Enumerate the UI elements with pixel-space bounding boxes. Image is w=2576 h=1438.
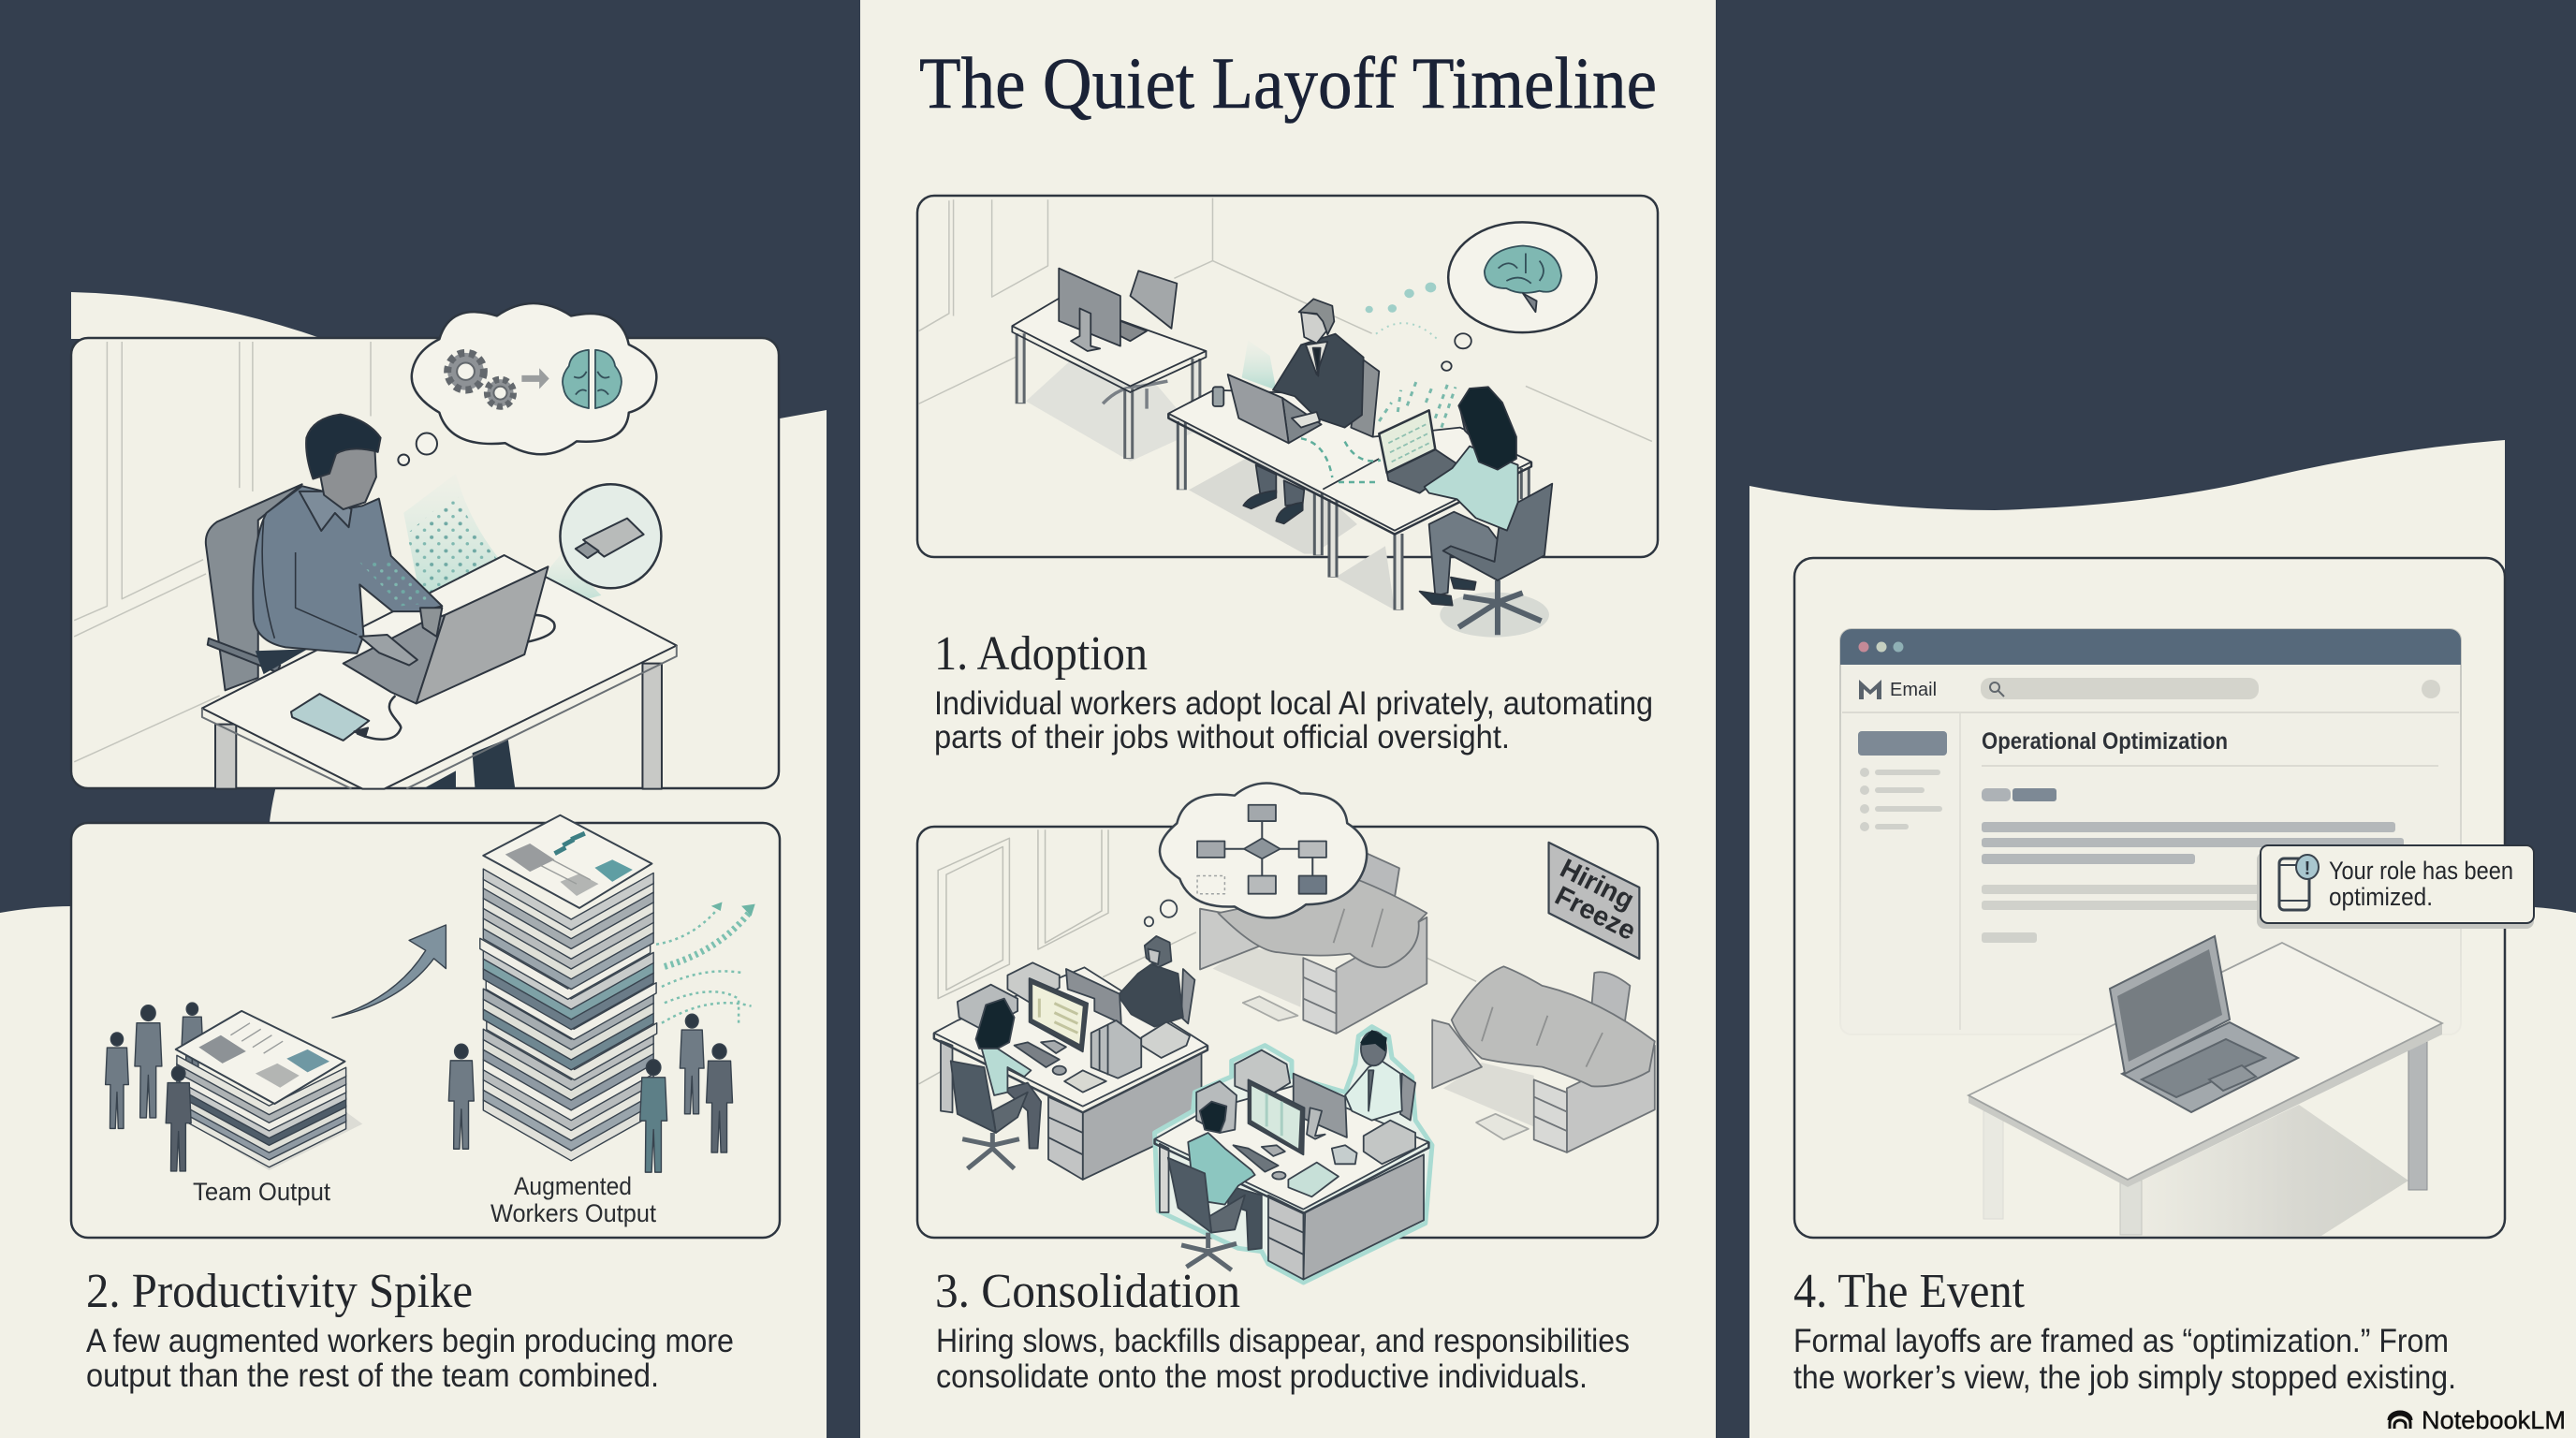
legs under desk xyxy=(423,739,515,789)
man's chair xyxy=(1351,359,1379,437)
text: event description: the worker’s view, the job simply stopped existing. xyxy=(1793,1359,2456,1396)
panel: worker with local AI xyxy=(71,303,779,789)
left column paper top scrap xyxy=(71,292,323,339)
thought cloud with flowchart xyxy=(1145,784,1367,926)
growth arrow xyxy=(332,925,446,1018)
scattered papers xyxy=(1243,996,1529,1139)
man in teal and chair xyxy=(1168,1102,1262,1270)
teal data glow xyxy=(1242,340,1276,390)
text: consolidation description xyxy=(936,1323,1630,1395)
empty desk xyxy=(1969,943,2442,1235)
NotebookLM logo: NotebookLM xyxy=(2422,1406,2566,1434)
thought cloud xyxy=(398,303,656,465)
augmented figures xyxy=(448,1014,733,1172)
floating data over desk xyxy=(1379,381,1456,428)
woman's chair base xyxy=(1440,580,1549,638)
woman's laptop xyxy=(1379,410,1458,493)
text: event description xyxy=(1793,1323,2456,1396)
heading: 4. The Event: 4. The Event xyxy=(1793,1265,2026,1318)
woman's legs and shoes xyxy=(1420,512,1498,606)
text: adoption description xyxy=(934,685,1653,756)
glow outline xyxy=(1155,1027,1432,1283)
arrow heads xyxy=(711,902,755,917)
office chair xyxy=(206,484,302,690)
sign text: Hiring Freeze: Freeze xyxy=(1550,881,1640,946)
woman's hair xyxy=(1458,387,1516,470)
window controls xyxy=(1859,642,1904,652)
icon: mail logo xyxy=(1859,680,1881,699)
icon: gears xyxy=(447,353,514,406)
external drive xyxy=(291,694,369,741)
text: adoption description: parts of their jobs without official oversight. xyxy=(934,719,1510,756)
laptop on desk xyxy=(2110,936,2298,1112)
sign text: Hiring Freeze: Hiring xyxy=(1555,854,1639,916)
email label: Email xyxy=(1890,680,1937,700)
woman's torso xyxy=(1425,447,1518,531)
panel: the event scene xyxy=(1794,558,2534,1238)
left desk monitors xyxy=(1030,969,1121,1053)
desktop monitor xyxy=(1059,269,1147,351)
woman at left desk xyxy=(975,999,1041,1149)
email subject: Operational Optimization xyxy=(1982,728,2228,755)
title: The Quiet Layoff Timeline xyxy=(919,42,1657,124)
empty desk shadow xyxy=(1026,361,1196,462)
left column paper xyxy=(0,410,827,1438)
long desk xyxy=(1168,390,1531,610)
augmented desk stacks and book xyxy=(1196,1050,1415,1196)
text: adoption description: Individual workers adopt local AI privately, automating xyxy=(934,685,1653,722)
label: augmented workers output: Augmented xyxy=(514,1172,632,1200)
window title bar xyxy=(1840,629,2461,665)
icon: usb stick bubble xyxy=(560,484,661,588)
icon: brain xyxy=(563,350,622,408)
team figures behind pile xyxy=(106,1003,203,1128)
room lines xyxy=(919,198,1652,441)
right column paper xyxy=(1749,440,2576,1438)
text: consolidation description: Hiring slows, backfills disappear, and responsibilities xyxy=(936,1323,1630,1359)
long desk floor shadows xyxy=(1189,456,1395,610)
jar xyxy=(1213,387,1223,406)
cables xyxy=(357,615,555,740)
glowing data beam xyxy=(403,474,601,611)
desk legs xyxy=(215,664,662,789)
notification callout xyxy=(2257,845,2534,929)
email window xyxy=(1840,629,2461,1034)
hiring freeze sign xyxy=(1549,843,1639,959)
icon: phone alert: ! xyxy=(2305,858,2310,879)
team figure in front of pile xyxy=(166,1066,191,1171)
covered desk back xyxy=(1200,853,1427,1034)
man in sweater xyxy=(253,415,442,666)
small output pile xyxy=(176,1011,362,1170)
heading: 1. Adoption: 1. Adoption xyxy=(934,627,1148,681)
email body lines xyxy=(1982,822,2404,943)
augmented desk xyxy=(1155,1086,1428,1280)
augmented desk monitors xyxy=(1249,1074,1347,1156)
man's laptop xyxy=(1228,374,1322,443)
notification text: optimized. xyxy=(2329,883,2433,911)
room lines xyxy=(919,829,1476,1084)
empty desk xyxy=(1012,299,1206,459)
sidebar xyxy=(1858,731,1947,831)
panel: team vs augmented output chart xyxy=(71,815,780,1238)
label: augmented workers output xyxy=(490,1172,656,1227)
text: productivity description xyxy=(86,1323,734,1394)
notification text: Your role has been xyxy=(2329,857,2513,885)
covered desk right xyxy=(1432,966,1655,1152)
notification text xyxy=(2329,857,2513,911)
panel: adoption scene xyxy=(917,196,1658,638)
empty chair xyxy=(1103,271,1177,409)
text: event description: Formal layoffs are framed as “optimization.” From xyxy=(1793,1323,2449,1359)
big output pile xyxy=(480,815,657,1161)
heading: 3. Consolidation: 3. Consolidation xyxy=(935,1265,1240,1318)
text: productivity description: output than the rest of the team combined. xyxy=(86,1357,659,1394)
woman's chair back xyxy=(1443,484,1552,580)
avatar xyxy=(2422,680,2440,698)
desk top xyxy=(202,555,677,789)
label: team output: Team Output xyxy=(193,1178,330,1206)
man in suit xyxy=(1273,299,1364,428)
text: productivity description: A few augmented workers begin producing more xyxy=(86,1323,734,1359)
text: consolidation description: consolidate onto the most productive individuals. xyxy=(936,1358,1588,1395)
teal trailing data xyxy=(656,910,752,1023)
panel: consolidation scene xyxy=(917,784,1658,1283)
binders and papers xyxy=(1015,1020,1190,1093)
wall lines xyxy=(74,342,371,762)
icon: phone alert xyxy=(2279,855,2319,910)
teal network on desk xyxy=(1301,438,1381,482)
man's lap behind desk xyxy=(256,649,308,674)
label: augmented workers output: Workers Output xyxy=(490,1199,656,1227)
sender chips xyxy=(1982,788,2056,801)
keyboard and mouse xyxy=(1233,1145,1286,1180)
left occupied desk xyxy=(934,967,1208,1180)
thought bubble with brain xyxy=(1366,222,1597,371)
laptop base xyxy=(344,615,445,703)
data dots over arm xyxy=(357,560,433,606)
man at back of augmented desk xyxy=(1345,1030,1415,1121)
paper stacks on left desk xyxy=(958,962,1060,1030)
suited woman and chair xyxy=(1118,936,1194,1027)
middle column paper xyxy=(860,0,1716,1438)
heading: 2. Productivity Spike: 2. Productivity Spike xyxy=(86,1265,473,1318)
search bar xyxy=(1981,678,2259,699)
man's legs and shoes xyxy=(1243,465,1304,523)
laptop screen xyxy=(417,566,549,703)
desk shadow xyxy=(2128,1105,2408,1236)
icon: arrow xyxy=(521,368,549,389)
left office chair xyxy=(951,1061,1028,1168)
